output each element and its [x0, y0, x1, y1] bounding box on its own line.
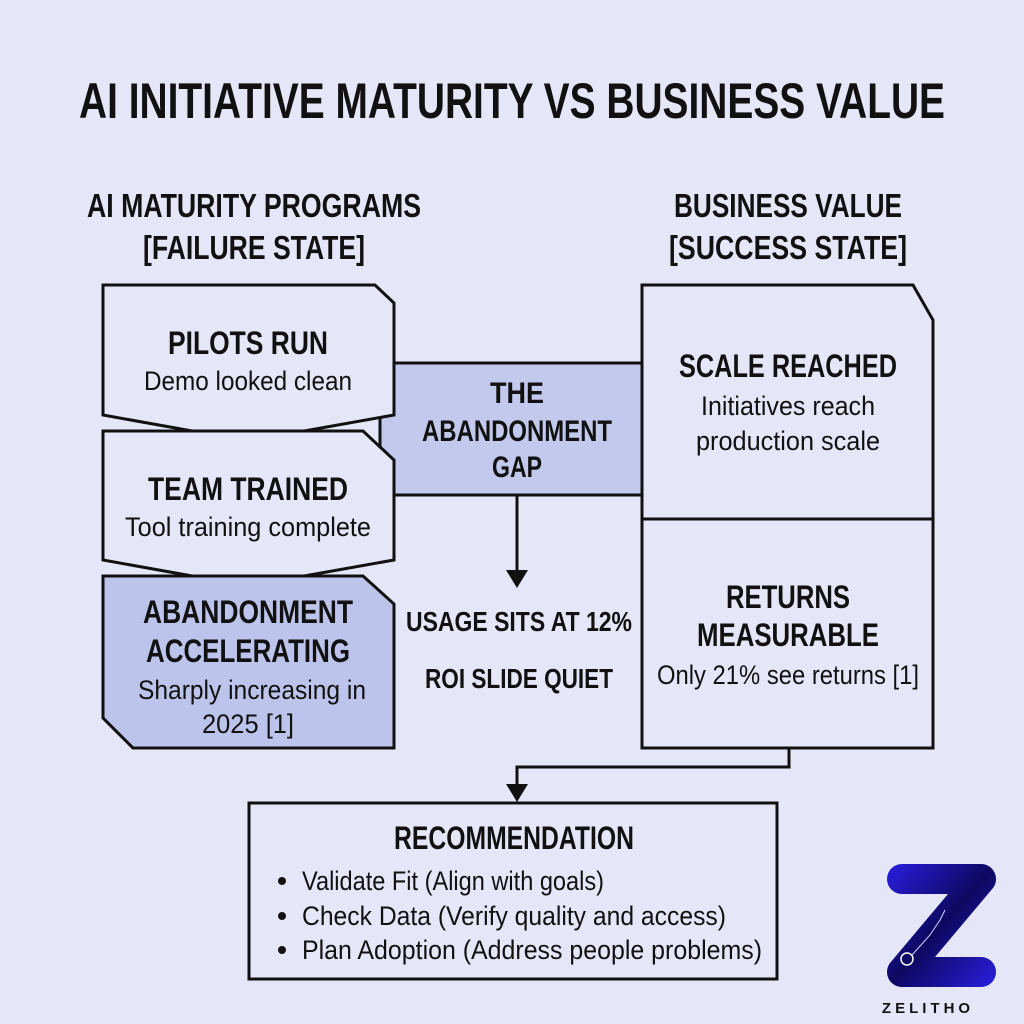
panel: abandonment gap: THE	[490, 377, 544, 410]
logo: zelitho	[882, 864, 996, 1017]
panel: team trained: Tool training complete	[125, 512, 371, 542]
heading: success state	[669, 187, 907, 266]
panel: success state	[642, 285, 933, 748]
panel: abandonment accelerating: 2025 [1]	[202, 709, 294, 739]
text: scale reached: Initiatives reach	[701, 391, 875, 421]
panel: abandonment gap: GAP	[492, 451, 542, 484]
heading: success state: BUSINESS VALUE	[674, 187, 902, 224]
text: returns measurable: MEASURABLE	[697, 617, 879, 653]
panel: recommendation: RECOMMENDATION	[394, 820, 634, 856]
logo: zelitho: ZELITHO	[882, 1000, 974, 1017]
panel: recommendation: Plan Adoption (Address people problems)	[302, 935, 762, 965]
panel: abandonment accelerating: ACCELERATING	[146, 633, 350, 669]
arrow: gap to stats	[506, 495, 528, 588]
panel: recommendation	[249, 803, 777, 979]
panel: recommendation: Check Data (Verify quality and access)	[302, 901, 726, 931]
heading: failure state: AI MATURITY PROGRAMS	[87, 187, 421, 224]
panel: abandonment accelerating: Sharply increasing in	[138, 675, 366, 705]
panel: team trained	[103, 431, 394, 586]
heading: failure state: [FAILURE STATE]	[143, 229, 365, 266]
text: usage stats: ROI SLIDE QUIET	[425, 663, 613, 694]
text: scale reached: SCALE REACHED	[679, 348, 897, 384]
panel: pilots run: PILOTS RUN	[168, 325, 328, 361]
panel: abandonment gap	[380, 363, 642, 495]
panel: recommendation: Validate Fit (Align with goals)	[302, 866, 604, 896]
panel: pilots run	[103, 285, 394, 441]
text: returns measurable: RETURNS	[726, 579, 850, 615]
panel: abandonment accelerating	[103, 576, 394, 748]
arrow: to recommendation	[506, 748, 789, 802]
heading: failure state	[87, 187, 421, 266]
text: returns measurable	[657, 579, 919, 690]
panel: abandonment gap: ABANDONMENT	[422, 415, 612, 448]
text: returns measurable: Only 21% see returns [1]	[657, 660, 919, 690]
panel: abandonment accelerating: ABANDONMENT	[143, 594, 353, 630]
panel: team trained: TEAM TRAINED	[148, 471, 348, 507]
text: usage stats: USAGE SITS AT 12%	[406, 606, 632, 637]
text: scale reached	[679, 348, 897, 456]
heading: success state: [SUCCESS STATE]	[669, 229, 907, 266]
panel: pilots run: Demo looked clean	[144, 366, 352, 396]
text: usage stats	[406, 606, 632, 694]
text: scale reached: production scale	[696, 426, 880, 456]
